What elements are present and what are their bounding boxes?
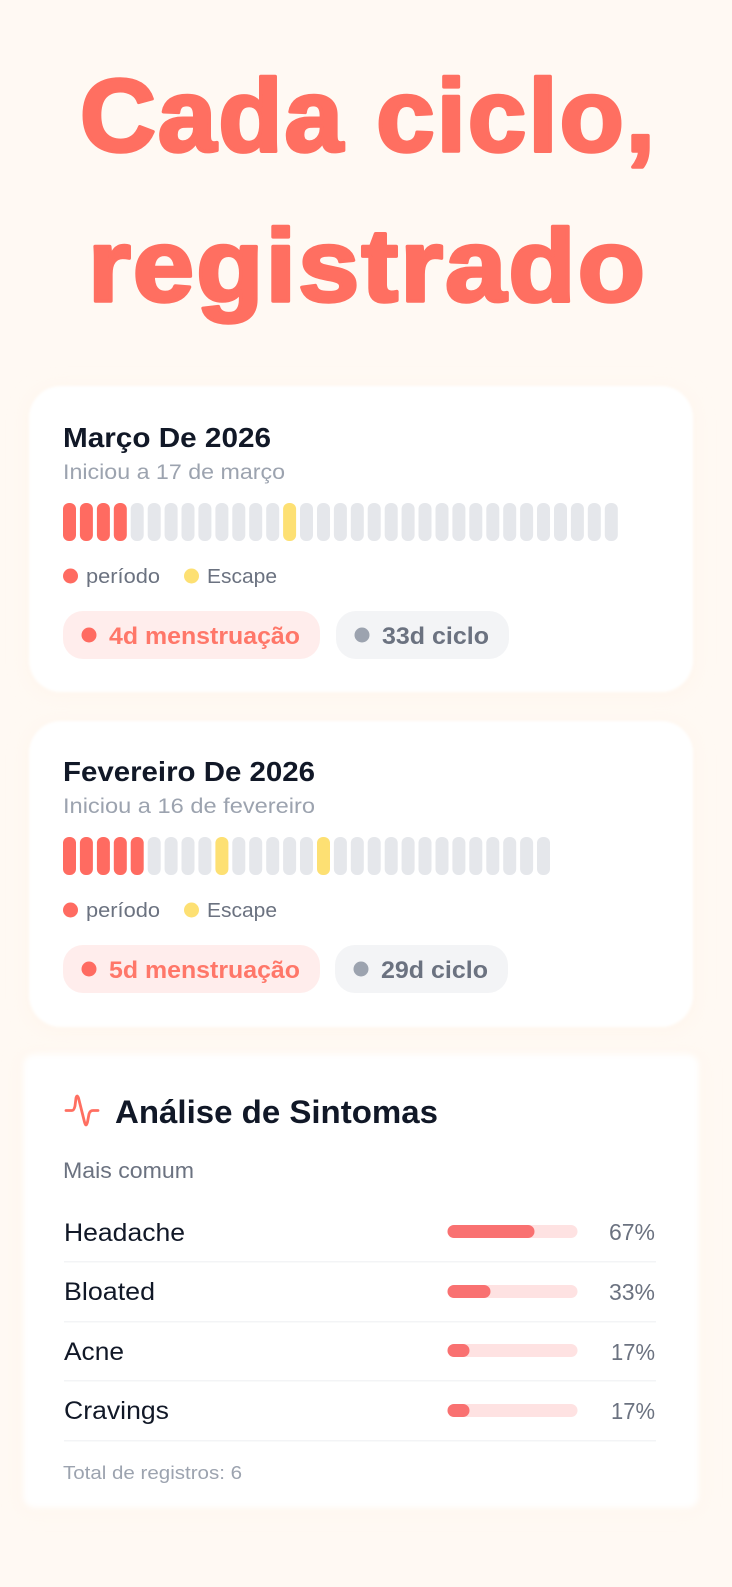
subtitle: início fevereiro: Iniciou a 16 de fevereiro bbox=[63, 794, 315, 818]
legend: fevereiro: período bbox=[86, 900, 160, 922]
legend: fevereiro: Escape bbox=[207, 900, 277, 922]
row: cravings: 17% bbox=[611, 1398, 655, 1424]
cycle bar: fevereiro bbox=[63, 837, 550, 875]
legend: março bbox=[63, 566, 277, 588]
cycle bar: março bbox=[63, 503, 618, 541]
pill: 4d menstruação bbox=[63, 611, 320, 659]
pill: 4d menstruação: 4d menstruação bbox=[109, 623, 300, 650]
heading: análise de sintomas: Análise de Sintomas bbox=[115, 1094, 438, 1130]
legend: março: Escape bbox=[207, 566, 277, 588]
pill: 33d ciclo bbox=[336, 611, 509, 659]
row: headache: Headache bbox=[64, 1219, 185, 1247]
title: Cada ciclo, bbox=[80, 58, 657, 173]
subtitle: início março: Iniciou a 17 de março bbox=[63, 460, 285, 484]
row: headache: 67% bbox=[609, 1219, 655, 1245]
row: cravings bbox=[64, 1397, 656, 1442]
pill: 33d ciclo: 33d ciclo bbox=[382, 623, 489, 650]
heading: março: Março De 2026 bbox=[63, 422, 271, 453]
row: bloated bbox=[64, 1278, 656, 1322]
panel: análise de sintomas bbox=[23, 1054, 699, 1508]
pill: 29d ciclo: 29d ciclo bbox=[381, 957, 488, 984]
subheading: mais comum: Mais comum bbox=[63, 1158, 194, 1183]
row: acne: Acne bbox=[64, 1338, 124, 1366]
pill: 29d ciclo bbox=[335, 945, 508, 993]
legend: fevereiro bbox=[63, 900, 277, 922]
title bbox=[80, 58, 657, 323]
row: acne bbox=[64, 1338, 656, 1382]
row: cravings: Cravings bbox=[64, 1397, 169, 1425]
row: acne: 17% bbox=[611, 1339, 655, 1365]
panel: março 2026 bbox=[29, 386, 693, 692]
footnote: total de registros: Total de registros: 6 bbox=[63, 1463, 242, 1483]
panel: fevereiro 2026 bbox=[29, 721, 693, 1027]
pill: 5d menstruação bbox=[63, 945, 320, 993]
title: registrado bbox=[88, 208, 647, 323]
pill: 5d menstruação: 5d menstruação bbox=[109, 957, 300, 984]
row: bloated: 33% bbox=[609, 1279, 655, 1305]
row: bloated: Bloated bbox=[64, 1278, 155, 1306]
row: headache bbox=[64, 1219, 656, 1262]
heading: fevereiro: Fevereiro De 2026 bbox=[63, 756, 315, 787]
legend: março: período bbox=[86, 566, 160, 588]
icon: activity pulse bbox=[66, 1096, 98, 1125]
